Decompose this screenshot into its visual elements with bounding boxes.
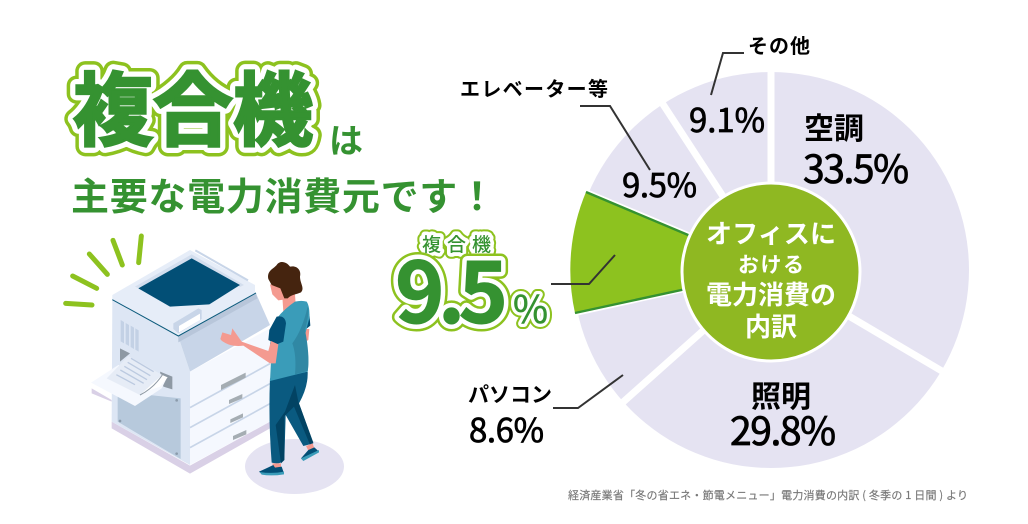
- label: エレベーター等 9.5%: エレベーター等: [460, 73, 608, 102]
- title: 複合機は: 複合機: [73, 47, 313, 163]
- floor shadow under person: [245, 439, 344, 494]
- subtitle: 主要な電力消費元です！: 主要な電力消費元です！: [71, 166, 496, 221]
- label: パソコン 8.6%: パソコン: [468, 379, 552, 409]
- leader lines: [551, 53, 744, 408]
- icon: attention rays: [66, 236, 141, 305]
- label: その他 9.1%: その他: [748, 30, 810, 59]
- source note: 経済産業省「冬の省エネ・節電メニュー」電力消費の内訳 ( 冬季の 1 日間 ) より: [568, 487, 968, 503]
- copier machine: [92, 250, 270, 474]
- label: 空調 33.5%: 33.5%: [803, 139, 909, 195]
- label: 照明 29.8%: 29.8%: [730, 401, 836, 457]
- callout: 複合機 9.5%: 複合機: [422, 230, 491, 257]
- person: legs: [259, 372, 319, 475]
- label: 照明 29.8%: [730, 372, 836, 457]
- center circle: [682, 183, 860, 361]
- label: パソコン 8.6%: 8.6%: [469, 404, 544, 452]
- illustration: copier and person: [66, 236, 344, 494]
- callout: 複合機 9.5%: 複合機: [422, 230, 491, 257]
- center text: オフィスにおける電力消費の内訳: [706, 214, 836, 344]
- label: パソコン 8.6%: [468, 379, 552, 452]
- label: 空調 33.5%: [803, 104, 909, 195]
- callout: 複合機 9.5%: 9.5: [395, 227, 508, 348]
- person: upper body: [220, 262, 310, 381]
- label: エレベーター等 9.5%: [460, 73, 697, 207]
- center text: オフィスにおける電力消費の内訳: おける: [738, 249, 804, 279]
- base pie (light segments): [573, 72, 969, 468]
- label: エレベーター等 9.5%: 9.5%: [622, 159, 697, 207]
- label: 照明 29.8%: 照明: [751, 372, 811, 416]
- label: 空調 33.5%: 空調: [804, 104, 864, 148]
- highlighted segment: 複合機: [570, 192, 771, 313]
- title: 複合機は: 複合機: [73, 47, 313, 163]
- label: その他 9.1%: [689, 30, 810, 142]
- segment gaps: [612, 60, 952, 412]
- callout: 複合機 9.5%: %: [513, 279, 548, 334]
- callout: 複合機 9.5%: 複合機: [422, 230, 491, 257]
- callout: 複合機 9.5%: 9.5: [395, 227, 508, 348]
- center text: オフィスにおける電力消費の内訳: 内訳: [745, 307, 797, 344]
- center text: オフィスにおける電力消費の内訳: 電力消費の: [706, 275, 836, 312]
- callout: 複合機 9.5%: %: [513, 279, 548, 334]
- pie chart: office electricity breakdown: [570, 60, 969, 468]
- title: 複合機は: は: [329, 114, 363, 163]
- paper tray with printed sheet: [91, 348, 172, 406]
- callout: 複合機 9.5%: 9.5: [395, 227, 508, 348]
- callout: 複合機 9.5%: %: [513, 279, 548, 334]
- title: 複合機は: 複合機: [73, 47, 313, 163]
- label: その他 9.1%: 9.1%: [689, 94, 765, 142]
- center text: オフィスにおける電力消費の内訳: オフィスに: [706, 214, 836, 251]
